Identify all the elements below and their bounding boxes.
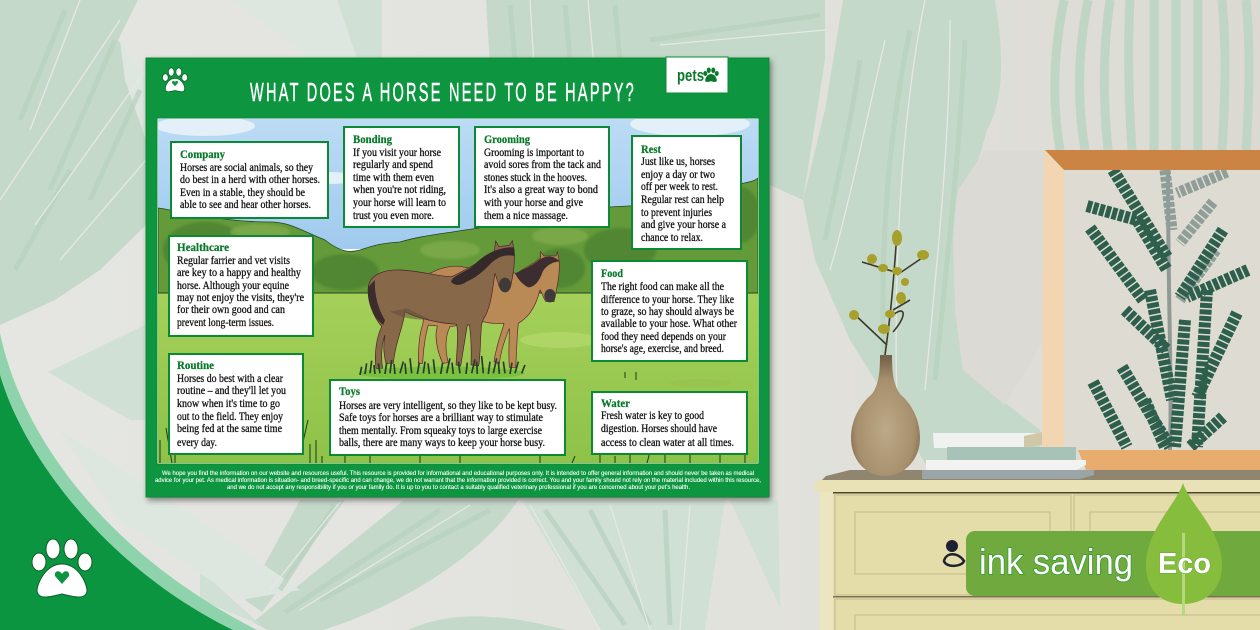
stack of books xyxy=(922,432,1094,479)
text box: bonding: If you visit your horse xyxy=(353,147,441,159)
text box: routine: routine – and they'll let you xyxy=(177,385,286,397)
back horse mane and muzzle xyxy=(515,257,559,302)
badge bar xyxy=(966,531,1260,596)
text box: food: available to your hose. What other xyxy=(601,318,737,330)
disclaimer footer xyxy=(155,471,761,491)
disclaimer footer: and we do not accept any responsibility if you or your family do. It is up to you to contact a suitably qualified veterinary professional if you are concerned about your pet's health. xyxy=(227,485,690,491)
paw icon bottom left xyxy=(32,539,92,597)
text box: food: food they need depends on your xyxy=(601,331,726,343)
text box: company: Even in a stable, they should be xyxy=(180,187,305,199)
drawer top left xyxy=(835,495,1071,595)
text box: healthcare: are key to a happy and healthy xyxy=(177,267,301,279)
title: WHAT DOES A HORSE NEED TO BE HAPPY? xyxy=(250,77,636,107)
text box: rest: Rest xyxy=(641,142,661,156)
text box: rest: and give your horse a xyxy=(641,219,726,231)
text box: company: able to see and hear other horses. xyxy=(180,199,311,211)
text box: healthcare: may not enjoy the visits, they're xyxy=(177,292,304,304)
text box: routine: out to the field. They enjoy xyxy=(177,411,283,423)
text box: bonding: when you're not riding, xyxy=(353,184,446,196)
frame bottom xyxy=(1078,450,1260,470)
text box: healthcare: horse. Although your equine xyxy=(177,280,289,292)
drawer bottom xyxy=(835,599,1260,630)
text box: grooming: Grooming is important to xyxy=(484,147,584,159)
text box: grooming: It's also a great way to bond xyxy=(484,184,598,196)
horses xyxy=(358,241,559,380)
text box: rest: off per week to rest. xyxy=(641,181,718,193)
wall poster card xyxy=(146,57,769,497)
frame top xyxy=(1045,150,1260,170)
text box: grooming: Grooming xyxy=(484,132,530,146)
text box: food: difference to your horse. They like xyxy=(601,294,734,306)
text box: water: access to clean water at all times. xyxy=(601,437,734,449)
text box: rest xyxy=(632,136,741,249)
plant xyxy=(1087,170,1248,450)
eco badge xyxy=(966,483,1260,616)
text box: rest: Just like us, horses xyxy=(641,156,715,168)
text box: water: Water xyxy=(601,396,631,410)
paw logo top left xyxy=(162,68,188,92)
disclaimer footer: We hope you find the information on our website and resources useful. This resource is provided for informational and educational purposes only. It is intended to offer general information and should never be taken as medical xyxy=(162,471,754,477)
frame mat xyxy=(1060,165,1260,455)
text box: grooming xyxy=(475,127,609,227)
text box: company: Company xyxy=(180,147,225,161)
text box: routine: being fed at the same time xyxy=(177,423,282,435)
text box: routine: know when it's time to go xyxy=(177,398,280,410)
text box: healthcare: prevent long-term issues. xyxy=(177,317,274,329)
drawer top right xyxy=(1074,495,1260,595)
text box: healthcare: Healthcare xyxy=(177,240,230,254)
poster background xyxy=(146,58,769,497)
front horse xyxy=(368,241,514,369)
text box: water: digestion. Horses should have xyxy=(601,423,717,435)
text box: food: horse's age, exercise, and breed. xyxy=(601,343,724,355)
text box: bonding: time with them even xyxy=(353,172,434,184)
text box: routine: Routine xyxy=(177,358,215,372)
picture frame with plant xyxy=(1042,150,1260,470)
eco droplet xyxy=(1146,483,1222,616)
text box: grooming: avoid sores from the tack and xyxy=(484,159,601,171)
text box: bonding xyxy=(344,127,459,227)
text box: healthcare: for their own good and can xyxy=(177,304,285,316)
text box: rest: chance to relax. xyxy=(641,232,703,244)
text box: grooming: them a nice massage. xyxy=(484,210,568,222)
text box: rest: enjoy a day or two xyxy=(641,169,715,181)
text box: bonding: Bonding xyxy=(353,132,392,146)
text box: bonding: trust you even more. xyxy=(353,210,434,222)
text box: water: Fresh water is key to good xyxy=(601,410,704,422)
pets logo tab: pets xyxy=(677,66,704,85)
bottom-left green swoosh xyxy=(0,333,257,630)
text box: company xyxy=(171,142,328,218)
text box: food xyxy=(592,261,747,361)
text box: toys: Safe toys for horses are a brilliant way to stimulate xyxy=(339,412,543,424)
eco droplet: Eco xyxy=(1158,548,1211,580)
text box: food: Food xyxy=(601,266,623,280)
dresser xyxy=(814,470,1260,630)
text box: food: to graze, so hay should always be xyxy=(601,306,734,318)
text box: routine: Horses do best with a clear xyxy=(177,373,283,385)
grass tuft under horses xyxy=(358,356,525,380)
text box: company: do best in a herd with other horses. xyxy=(180,174,320,186)
text box: toys: Horses are very intelligent, so they like to be kept busy. xyxy=(339,400,557,412)
text box: bonding: your horse will learn to xyxy=(353,197,446,209)
text box: bonding: regularly and spend xyxy=(353,159,433,171)
light shadow patch on wall xyxy=(953,150,1044,405)
disclaimer footer: advice for your pet. As medical information is situation- and breed-specific and can change, we do not warrant that the information provided is correct. You and your family should not rely on the material included within this resource, xyxy=(155,478,761,484)
text box: routine xyxy=(169,354,303,454)
text box: toys: balls, there are many ways to keep your horse busy. xyxy=(339,437,545,449)
text box: healthcare: Regular farrier and vet visits xyxy=(177,255,290,267)
text box: toys: Toys xyxy=(339,384,360,398)
ink saving label: ink saving xyxy=(979,541,1133,582)
text box: grooming: with your horse and give xyxy=(484,197,583,209)
text box: healthcare xyxy=(169,236,313,336)
text box: company: Horses are social animals, so they xyxy=(180,162,313,174)
text box: rest: to prevent injuries xyxy=(641,207,712,219)
text box: water xyxy=(592,392,747,454)
text box: routine: every day. xyxy=(177,437,217,449)
text box: food: The right food can make all the xyxy=(601,281,724,293)
text box: toys xyxy=(330,380,565,455)
front horse mane, tail and muzzle xyxy=(368,247,515,325)
vase with branches xyxy=(849,230,929,476)
back horse xyxy=(418,252,559,367)
text box: grooming: stones stuck in the hooves. xyxy=(484,172,587,184)
pets logo tab xyxy=(666,57,728,93)
text box: toys: them mentally. From squeaky toys to large exercise xyxy=(339,425,542,437)
frame left xyxy=(1042,150,1064,450)
drawer handle xyxy=(944,540,964,566)
text box: rest: Regular rest can help xyxy=(641,194,724,206)
illustration: field scene xyxy=(155,112,760,464)
